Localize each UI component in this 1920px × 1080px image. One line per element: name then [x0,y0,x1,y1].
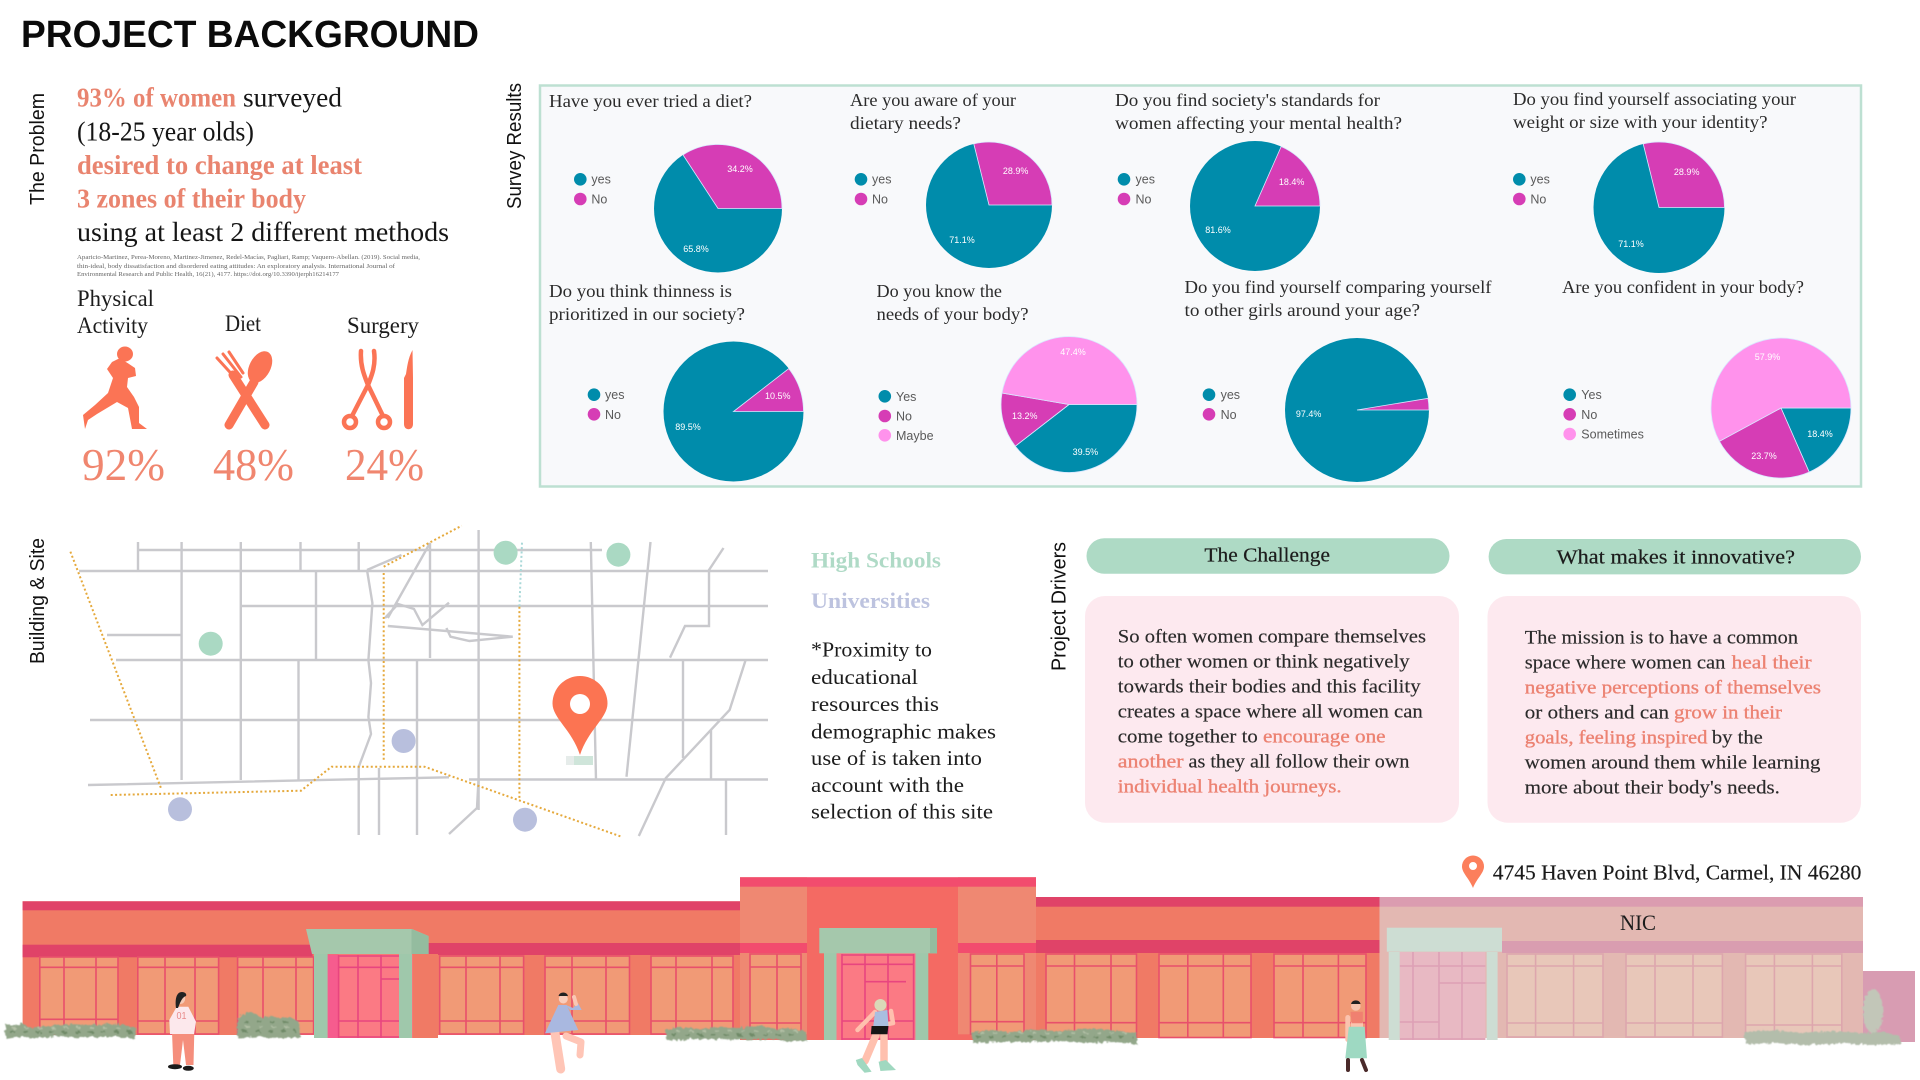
icon: runner [83,346,147,429]
heading: Survey Results: Survey Results [504,83,526,209]
chart: tried a diet: 34.2% [727,164,753,174]
chart: thinness prioritized: prioritized in our society? [549,304,745,324]
chart: needs of your body: 47.4% [1060,347,1086,357]
note: educational [811,665,918,689]
chart: needs of your body: 39.5% [1073,447,1098,457]
address [1462,856,1861,888]
chart: confident in your body: Are you confident in your body? [1562,277,1804,297]
chart: confident in your body: 57.9% [1755,352,1780,362]
card: challenge text: come together to [1118,726,1258,747]
heading: The Problem: The Problem [27,93,49,205]
card: innovation text [1488,596,1861,823]
chart: confident in your body: 18.4% [1807,429,1833,439]
chart: needs of your body: 13.2% [1012,411,1038,421]
card: challenge text [1085,596,1459,823]
chart: society's standards: No [1136,192,1152,206]
label: physical activity: Activity [77,313,148,338]
citation: Environmental Research and Public Health, 16(21), 4177. https://doi.org/10.3390/ijerph16214177 [77,271,339,278]
panel: the problem [27,82,449,490]
note [811,638,996,824]
chart: aware of dietary needs: 28.9% [1003,166,1028,176]
panel: what makes it innovative [1488,539,1861,823]
chart: tried a diet: 65.8% [683,244,709,254]
chart: weight and identity [1513,89,1796,273]
card: challenge text: encourage one [1263,726,1386,747]
chart: comparing yourself [1184,277,1492,482]
chart: needs of your body [876,281,1137,472]
site footprint [566,756,593,765]
chart: thinness prioritized: 10.5% [765,391,791,401]
shrubs [5,989,1900,1045]
card: challenge text: individual health journeys. [1118,776,1342,797]
note: *Proximity to [811,638,932,662]
map legend and note [811,548,996,824]
statement text: desired to change at least [77,150,362,180]
chart: confident in your body: Yes [1581,388,1602,402]
card: challenge text: towards their bodies and this facility [1118,676,1421,697]
person: woman in mint trousers [1345,1000,1367,1070]
right wing [1036,897,1388,1038]
note: selection of this site [811,800,993,824]
card: innovation text: women around them while learning [1525,752,1821,773]
label: NIC: NIC [1620,910,1656,935]
label: diet: Diet [225,311,262,336]
chart: confident in your body: 23.7% [1751,451,1777,461]
chart: comparing yourself: to other girls around your age? [1184,300,1420,320]
chart: society's standards: Do you find society's standards for [1115,90,1380,110]
chart: tried a diet: Have you ever tried a diet? [549,91,752,111]
faded NIC unit [1380,897,1915,1042]
card: innovation text: grow in their [1674,702,1783,723]
heading: Project Drivers: Project Drivers [1049,542,1071,671]
card: innovation text: The mission is to have a common [1525,627,1799,648]
card: innovation text: negative perceptions of themselves [1525,677,1821,698]
card: innovation text: more about their body's needs. [1525,777,1780,798]
card: challenge text: another [1118,751,1184,772]
person: woman in black shorts [856,999,896,1073]
pill heading: What makes it innovative? [1489,539,1861,574]
chart: society's standards: 18.4% [1279,177,1304,187]
title: PROJECT BACKGROUND [21,14,479,56]
icon: fork and spoon [217,347,277,425]
central tower [740,877,1036,1040]
chart: tried a diet [549,91,782,272]
icon: scissors and scalpel [344,350,413,429]
card: challenge text: to other women or think negatively [1118,651,1410,672]
pill heading: What makes it innovative?: What makes it innovative? [1557,546,1795,568]
chart: tried a diet: No [591,192,607,206]
note: demographic makes [811,719,996,743]
entrance two [819,928,937,1040]
chart: weight and identity: yes [1530,172,1550,186]
chart: thinness prioritized: Do you think thinness is [549,281,732,301]
note: resources this [811,692,939,716]
chart: weight and identity: No [1530,192,1546,206]
building illustration [5,877,1915,1073]
chart: aware of dietary needs [850,90,1052,268]
stat: 48%: 48% [213,439,294,490]
legend: high schools: High Schools [811,548,941,573]
chart: society's standards [1115,90,1402,271]
label: physical activity: Physical [77,286,154,311]
chart: tried a diet: yes [591,172,611,186]
chart: aware of dietary needs: Are you aware of your [850,90,1016,110]
chart: aware of dietary needs: No [872,192,888,206]
pill heading: The Challenge [1086,538,1450,574]
statement text: surveyed [243,82,343,112]
note: use of is taken into [811,746,982,770]
note: account with the [811,773,964,797]
pill heading: The Challenge: The Challenge [1204,545,1330,567]
entrance one [306,929,438,1038]
heading: Building & Site: Building & Site [27,538,49,664]
citation: Aparicio-Martinez, Perea-Moreno, Martinez-Jimenez, Redel-Macías, Pagliari, Ramp; Vaquero-Abellan. (2019). Social media, [77,254,421,261]
chart: thinness prioritized: 89.5% [675,422,701,432]
chart: thinness prioritized [549,281,804,482]
map markers: universities [168,729,537,832]
person: woman in white shirt: 01 [176,1011,187,1022]
chart: society's standards: women affecting your mental health? [1115,113,1402,133]
label: surgery: Surgery [347,313,419,338]
chart: confident in your body: Sometimes [1581,428,1644,442]
address: 4745 Haven Point Blvd, Carmel, IN 46280 [1493,860,1861,884]
chart: comparing yourself: No [1221,408,1237,422]
label: physical activity [77,286,154,338]
person: woman in blue dress [545,993,582,1069]
statement text: 93% of women [77,82,236,112]
stat: 92%: 92% [82,439,165,490]
left wing [23,901,740,1035]
chart: comparing yourself: 97.4% [1296,409,1321,419]
chart: comparing yourself: Do you find yourself comparing yourself [1184,277,1492,297]
chart: aware of dietary needs: dietary needs? [850,113,961,133]
panel: the challenge [1085,538,1459,823]
statement text: (18-25 year olds) [77,116,254,146]
card: challenge text: So often women compare themselves [1118,626,1426,647]
statement text [77,82,449,247]
chart: aware of dietary needs: yes [872,172,891,186]
chart: needs of your body: needs of your body? [876,304,1029,324]
chart: confident in your body: No [1581,408,1597,422]
chart: comparing yourself: yes [1221,388,1240,402]
card: innovation text: or others and can [1525,702,1670,723]
card: challenge text: creates a space where all women can [1118,701,1423,722]
stat: 24%: 24% [345,439,424,490]
statement text: using at least 2 different methods [77,217,449,247]
chart: needs of your body: No [896,410,912,424]
panel: survey results [540,86,1861,486]
citation [77,254,421,278]
chart: needs of your body: Maybe [896,429,934,443]
legend: universities: Universities [811,588,930,613]
card: innovation text: by the [1712,727,1763,748]
icon: location pin [552,676,608,755]
icon: address pin [1462,856,1484,888]
card: challenge text: as they all follow their own [1188,751,1410,772]
map markers: high schools [199,541,630,656]
chart: thinness prioritized: yes [605,388,624,402]
chart: weight and identity: 71.1% [1618,239,1644,249]
chart: weight and identity: 28.9% [1674,167,1699,177]
chart: society's standards: 81.6% [1205,225,1231,235]
person: woman in white shirt [168,992,196,1071]
chart: society's standards: yes [1136,172,1155,186]
card: innovation text: goals, feeling inspired [1525,727,1708,748]
citation: thin-ideal, body dissatisfaction and disordered eating attitudes: An exploratory analysis. International Journal of [77,263,395,270]
statement text: 3 zones of their body [77,184,306,214]
chart: weight and identity: weight or size with your identity? [1513,112,1768,132]
chart: weight and identity: Do you find yourself associating your [1513,89,1796,109]
site map [70,526,768,837]
card: innovation text: heal their [1732,652,1812,673]
card: innovation text: space where women can [1525,652,1726,673]
chart: aware of dietary needs: 71.1% [949,235,975,245]
chart: needs of your body: Do you know the [876,281,1002,301]
chart: thinness prioritized: No [605,408,621,422]
chart: needs of your body: Yes [896,390,916,404]
chart: confident in your body [1562,277,1851,478]
